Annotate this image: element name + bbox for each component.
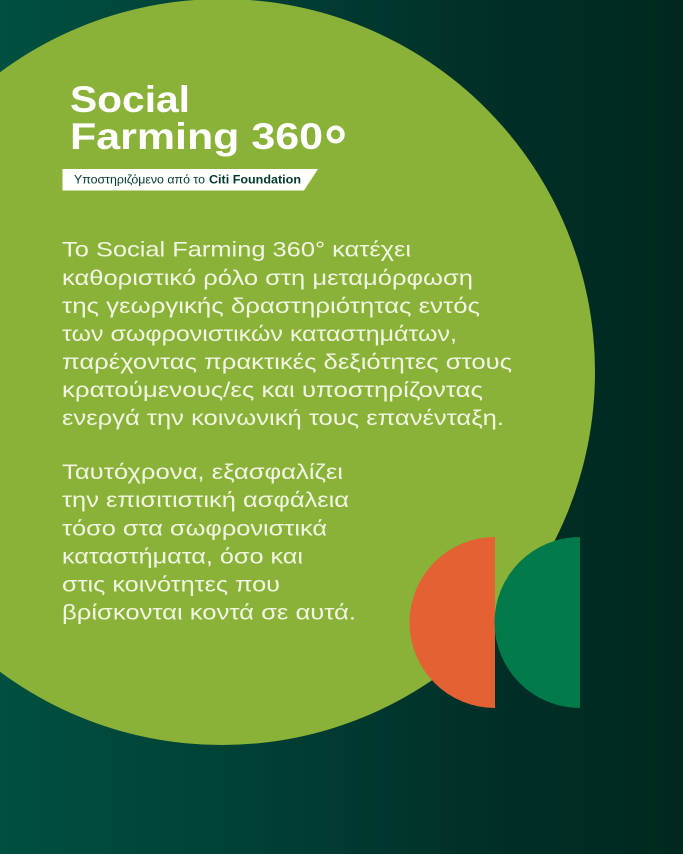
text block: second paragraph: Ταυτόχρονα, εξασφαλίζει — [62, 460, 343, 484]
icon: orange semicircle — [410, 537, 495, 708]
text block: second paragraph: την επισιτιστική ασφάλεια — [62, 488, 349, 512]
title: Farming 360 — [70, 116, 323, 157]
text block: first paragraph — [62, 238, 512, 430]
banner: supported by Citi Foundation: Citi Foundation — [209, 174, 301, 186]
icon: green semicircle — [494, 537, 580, 708]
text block: second paragraph: τόσο στα σωφρονιστικά — [62, 516, 327, 540]
green circle — [0, 0, 595, 745]
title: ° — [324, 114, 347, 179]
title — [70, 79, 347, 179]
text block: first paragraph: της γεωργικής δραστηριότητας εντός — [62, 294, 480, 318]
text block: second paragraph — [62, 460, 356, 624]
text block: first paragraph: κρατούμενους/ες και υποστηρίζοντας — [62, 378, 483, 402]
text block: second paragraph: καταστήματα, όσο και — [62, 544, 303, 568]
text block: first paragraph: των σωφρονιστικών καταστημάτων, — [62, 322, 457, 346]
text block: first paragraph: ενεργά την κοινωνική τους επανένταξη. — [62, 406, 504, 430]
text block: second paragraph: στις κοινότητες που — [62, 572, 280, 596]
text block: first paragraph: Το Social Farming 360° κατέχει — [62, 238, 411, 262]
title: Social — [70, 79, 190, 120]
text block: first paragraph: παρέχοντας πρακτικές δεξιότητες στους — [62, 350, 512, 374]
text block: second paragraph: βρίσκονται κοντά σε αυτά. — [62, 600, 356, 624]
banner: supported by Citi Foundation — [62, 169, 318, 190]
banner: supported by Citi Foundation: Υποστηριζόμενο από το — [74, 174, 205, 186]
text block: first paragraph: καθοριστικό ρόλο στη μεταμόρφωση — [62, 266, 473, 290]
